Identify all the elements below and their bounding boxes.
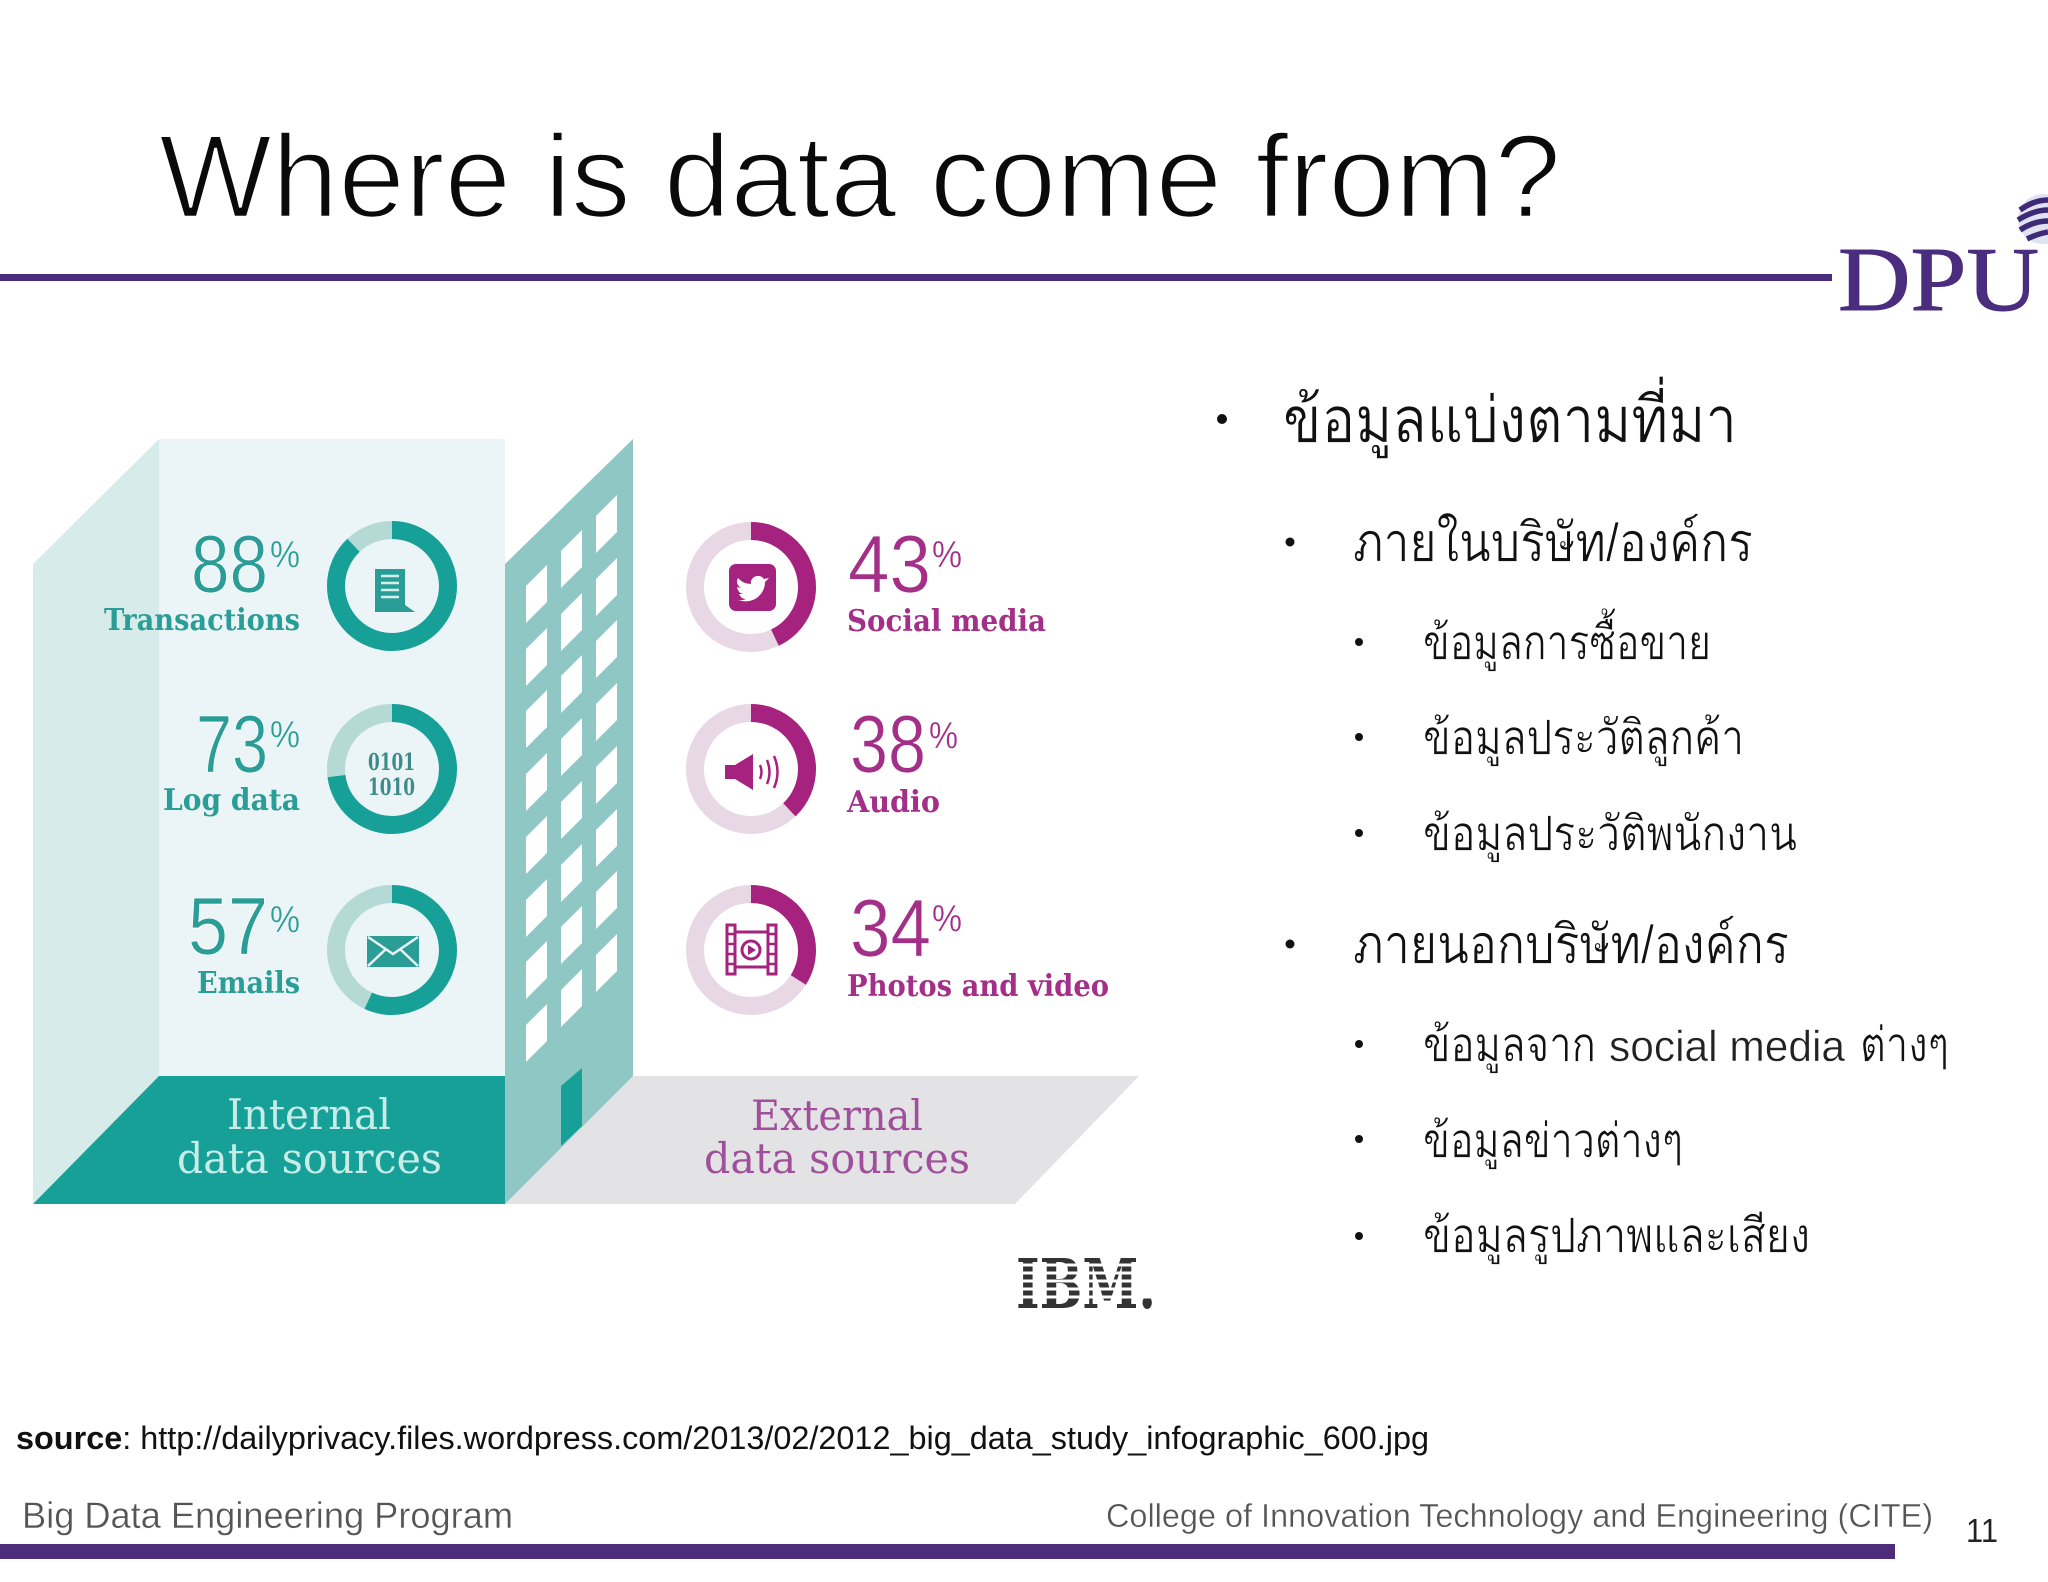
footer: program name: Big Data Engineering Program (22, 1495, 513, 1536)
header rule (0, 274, 1832, 281)
bullet level 3: social media: ข้อมูลจาก (1423, 1019, 1596, 1074)
bullet level 1: by origin: ข้อมูลแบ่งตามที่มา (1283, 376, 1737, 459)
bullet level 3: images and audio: ข้อมูลรูปภาพและเสียง (1423, 1210, 1810, 1265)
bullet list: data by origin (1217, 376, 1949, 1265)
label: external data sources (704, 1091, 970, 1183)
stat: emails 57% (188, 881, 448, 1006)
bullet level 1: by origin (1217, 376, 1737, 459)
stat: photos and video 34%: Photos and video (847, 969, 1109, 1004)
stat: log data 73%: Log data (163, 783, 300, 818)
bullet level 3: employee history: ข้อมูลประวัติพนักงาน (1423, 808, 1797, 863)
bullet level 2: internal: ภายในบริษัท/องค์กร (1353, 512, 1753, 573)
bullet level 3: sales data: ข้อมูลการซื้อขาย (1423, 608, 1711, 672)
stat: social media 43%: % (932, 534, 962, 576)
stat: emails 57%: Emails (197, 966, 300, 1001)
stat: audio 38% (695, 699, 958, 825)
stat: emails 57%: 57 (188, 881, 268, 972)
label: external data sources: data sources (704, 1134, 970, 1183)
label: internal data sources: Internal (227, 1090, 391, 1139)
logo globe (2018, 194, 2048, 244)
stat: audio 38%: 38 (850, 699, 926, 790)
stat: photos and video 34%: 34 (850, 883, 931, 974)
stat: log data 73%: % (270, 714, 300, 756)
stat: social media 43% (695, 519, 1046, 643)
DPU logo (1838, 194, 2048, 330)
title: Where is data come from? (159, 111, 1561, 243)
bullet level 3: customer history: ข้อมูลประวัติลูกค้า (1423, 712, 1744, 767)
stat: log data 73%: 1010 (368, 774, 415, 801)
bullet level 3: customer history (1355, 712, 1744, 767)
bullet level 3: social media: social media (1609, 1022, 1846, 1071)
stat: log data 73%: 73 (196, 699, 268, 790)
label: internal data sources (177, 1090, 442, 1183)
footer: college name: College of Innovation Technology and Engineering (CITE) (1106, 1497, 1933, 1534)
stat: transactions 88%: Transactions (104, 603, 300, 638)
IBM logo: IBM. (1016, 1245, 1156, 1325)
infographic: internal and external data sources (33, 439, 1159, 1325)
bullet level 3: social media (1355, 1019, 1949, 1074)
stat: log data 73% (163, 699, 448, 825)
bullet level 3: news (1355, 1115, 1683, 1170)
stat: transactions 88%: 88 (191, 519, 268, 610)
stat: social media 43%: 43 (848, 519, 931, 610)
label: external data sources: External (751, 1091, 923, 1140)
external floor (505, 1076, 1139, 1204)
bullet level 3: social media: ต่างๆ (1860, 1019, 1949, 1072)
stat: transactions 88%: % (270, 534, 300, 576)
bullet level 3: news: ข้อมูลข่าวต่างๆ (1423, 1115, 1683, 1170)
bullet level 3: sales data (1355, 608, 1711, 672)
stat: audio 38%: Audio (846, 785, 940, 820)
stat: transactions 88% (104, 519, 448, 642)
logo wordmark: DPU (1838, 229, 2039, 330)
bullet level 2: external: ภายนอกบริษัท/องค์กร (1353, 915, 1789, 975)
source citation: source: http://dailyprivacy.files.wordpress.com/2013/02/2012_big_data_study_infographic_600.jpg (16, 1420, 1429, 1456)
stat: social media 43%: Social media (847, 604, 1046, 639)
stat: emails 57%: % (270, 899, 300, 941)
stat: photos and video 34% (695, 883, 1109, 1006)
building back wall (159, 439, 505, 1076)
label: internal data sources: data sources (177, 1134, 442, 1183)
footer bar (0, 1544, 1895, 1559)
stat: log data 73%: 0101 (368, 749, 415, 776)
building side face with windows and door (505, 439, 633, 1204)
page number: 11 (1966, 1512, 1998, 1549)
building left wall (33, 439, 159, 1204)
stat: audio 38%: % (929, 715, 958, 757)
internal floor (33, 1076, 505, 1204)
stat: photos and video 34%: % (932, 898, 962, 940)
